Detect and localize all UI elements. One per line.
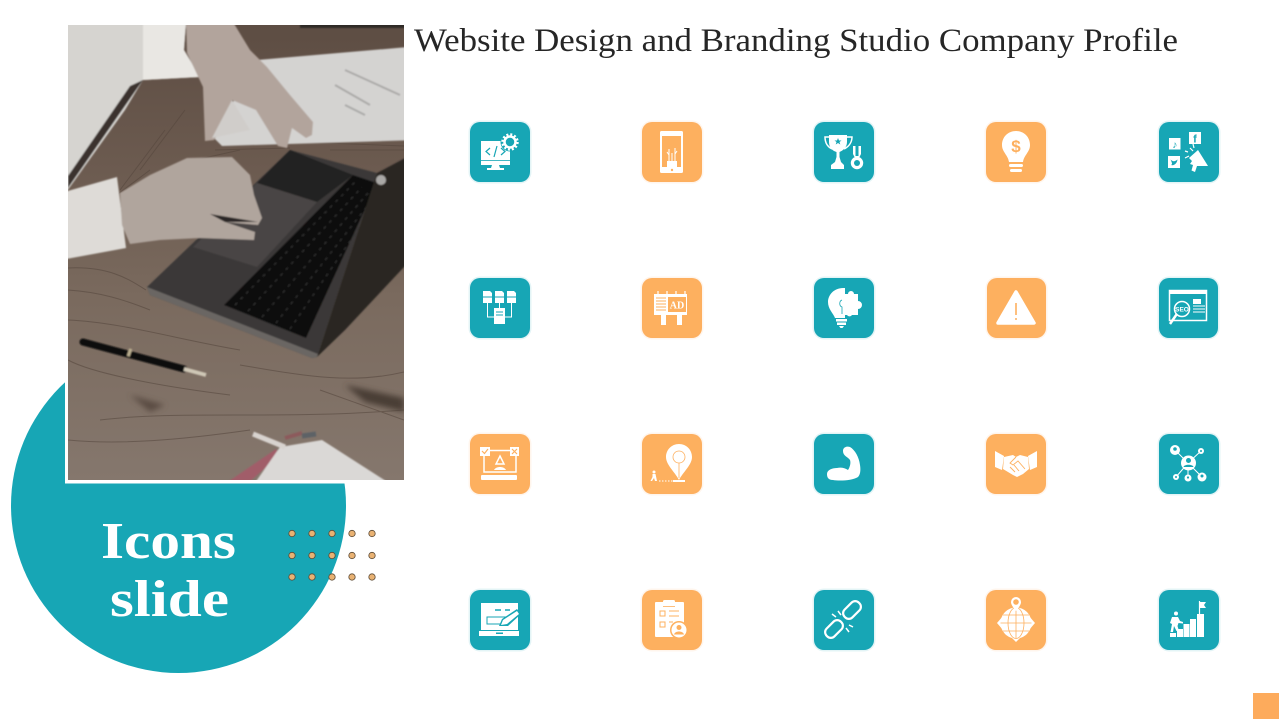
icon: light bulb with dollar xyxy=(986,122,1046,182)
icon: light bulb with puzzle piece xyxy=(814,278,874,338)
shirt sleeve xyxy=(68,25,196,191)
heading: Icons slide xyxy=(101,513,236,628)
icon: people network xyxy=(1159,434,1219,494)
laptop upper palm area xyxy=(257,150,353,202)
icon: laptop with design vector xyxy=(470,434,530,494)
icon: location pin with walking person xyxy=(642,434,702,494)
heading: slide title: Website Design and Branding Studio Company Profile xyxy=(414,23,1178,59)
icon: AD billboard xyxy=(642,278,702,338)
icon: globe with location pin xyxy=(986,590,1046,650)
keyboard xyxy=(224,175,377,338)
icon: person climbing steps to flag xyxy=(1159,590,1219,650)
icon: social media megaphone xyxy=(1159,122,1219,182)
decorative dot grid xyxy=(289,530,375,580)
laptop screen back xyxy=(317,158,404,357)
pen xyxy=(83,342,184,369)
corner accent square xyxy=(1253,693,1279,719)
teal circle panel xyxy=(11,338,346,673)
top hand xyxy=(186,20,313,148)
photo white frame xyxy=(65,25,404,484)
icon: social media megaphone: ♪ xyxy=(1172,140,1177,151)
icon: SEO browser window xyxy=(1159,278,1218,338)
icon: flexed arm xyxy=(814,434,874,494)
lower hand xyxy=(120,157,262,244)
heading: Icons slide: Icons xyxy=(101,513,236,570)
blurred notebook and red pen xyxy=(230,449,278,480)
icon: monitor with code and gear xyxy=(470,122,530,182)
icon: AD billboard: AD xyxy=(670,300,684,312)
icon: SEO browser window: SEO xyxy=(1175,306,1189,314)
icon: file server flow xyxy=(470,278,530,338)
icon: smartphone with circuit xyxy=(642,122,702,182)
cuff xyxy=(68,176,127,260)
icon: social media megaphone: f xyxy=(1193,134,1197,146)
icon: warning triangle xyxy=(987,278,1046,338)
icon: broken chain link xyxy=(814,590,874,650)
icon: light bulb with dollar: $ xyxy=(1011,137,1021,156)
icon: trophy and medal xyxy=(814,122,874,182)
laptop base xyxy=(147,150,377,358)
icon: clipboard with user xyxy=(642,590,702,650)
dark desk edge at top xyxy=(300,10,420,28)
icon: laptop with pen tool xyxy=(470,590,530,650)
icon: handshake xyxy=(986,434,1046,494)
heading: Icons slide: slide xyxy=(110,571,229,628)
top paper xyxy=(213,46,420,146)
photo: hands on laptop at wooden desk xyxy=(68,25,404,480)
trackpad xyxy=(193,183,317,267)
